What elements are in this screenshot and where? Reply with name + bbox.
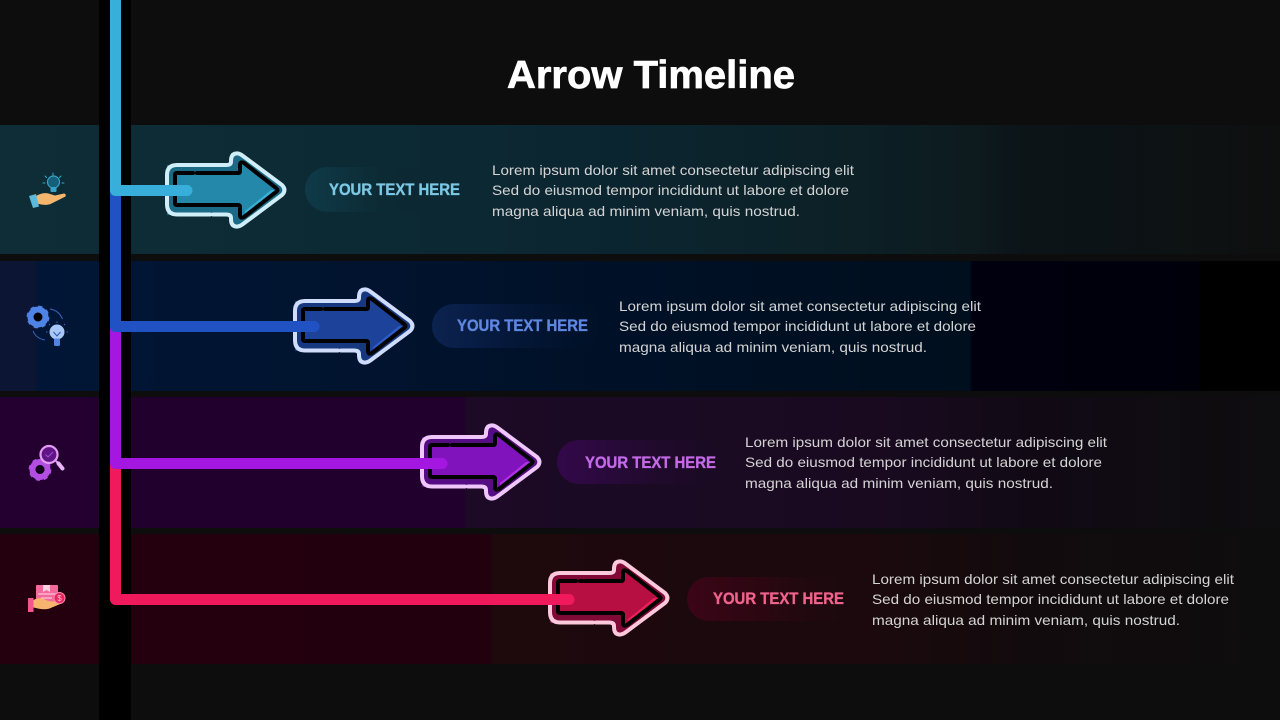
row 4 description: Lorem ipsum dolor sit amet consectetur adipiscing elit — [872, 571, 1234, 587]
icon: hand with parcel and coin — [28, 585, 65, 612]
row 1 label pill: YOUR TEXT HERE — [329, 181, 460, 199]
row 2 description — [619, 298, 981, 355]
row 3 description: Sed do eiusmod tempor incididunt ut labore et dolore — [745, 454, 1102, 470]
row 1 label pill — [305, 167, 475, 212]
row 1 description: Sed do eiusmod tempor incididunt ut labore et dolore — [492, 182, 849, 198]
row 4 description: magna aliqua ad minim veniam, quis nostrud. — [872, 612, 1180, 628]
title: Arrow Timeline — [507, 54, 795, 97]
row 3 description — [745, 434, 1107, 491]
row 2 description: Sed do eiusmod tempor incididunt ut labore et dolore — [619, 318, 976, 334]
row 2 description: magna aliqua ad minim veniam, quis nostrud. — [619, 339, 927, 355]
row 2 description: Lorem ipsum dolor sit amet consectetur adipiscing elit — [619, 298, 981, 314]
row 2 label pill: YOUR TEXT HERE — [457, 317, 588, 335]
icon: hand with parcel and coin: $ — [57, 594, 62, 603]
row 4 label pill: YOUR TEXT HERE — [713, 590, 844, 608]
row 3 description: Lorem ipsum dolor sit amet consectetur adipiscing elit — [745, 434, 1107, 450]
timeline connectors — [116, 0, 569, 600]
timeline track column — [99, 0, 131, 720]
arrow 2 — [295, 289, 414, 363]
row 1 description: magna aliqua ad minim veniam, quis nostrud. — [492, 203, 800, 219]
row 2 label pill — [432, 304, 602, 348]
arrow 1 — [167, 153, 286, 227]
background bands — [0, 125, 1280, 664]
icon: gear and magnifier — [30, 446, 62, 480]
row 3 label pill: YOUR TEXT HERE — [585, 454, 716, 472]
row 3 description: magna aliqua ad minim veniam, quis nostrud. — [745, 475, 1053, 491]
row 4 description — [872, 571, 1234, 628]
row 3 label pill — [557, 440, 727, 484]
row 4 label pill — [687, 577, 857, 621]
row 1 description — [492, 162, 854, 219]
arrow 4 — [550, 561, 669, 635]
icon: hand with light bulb — [29, 173, 66, 208]
icon: gear and bulb cycle — [28, 307, 68, 346]
row 4 description: Sed do eiusmod tempor incididunt ut labore et dolore — [872, 591, 1229, 607]
row 1 description: Lorem ipsum dolor sit amet consectetur adipiscing elit — [492, 162, 854, 178]
arrow 3 — [422, 425, 541, 499]
